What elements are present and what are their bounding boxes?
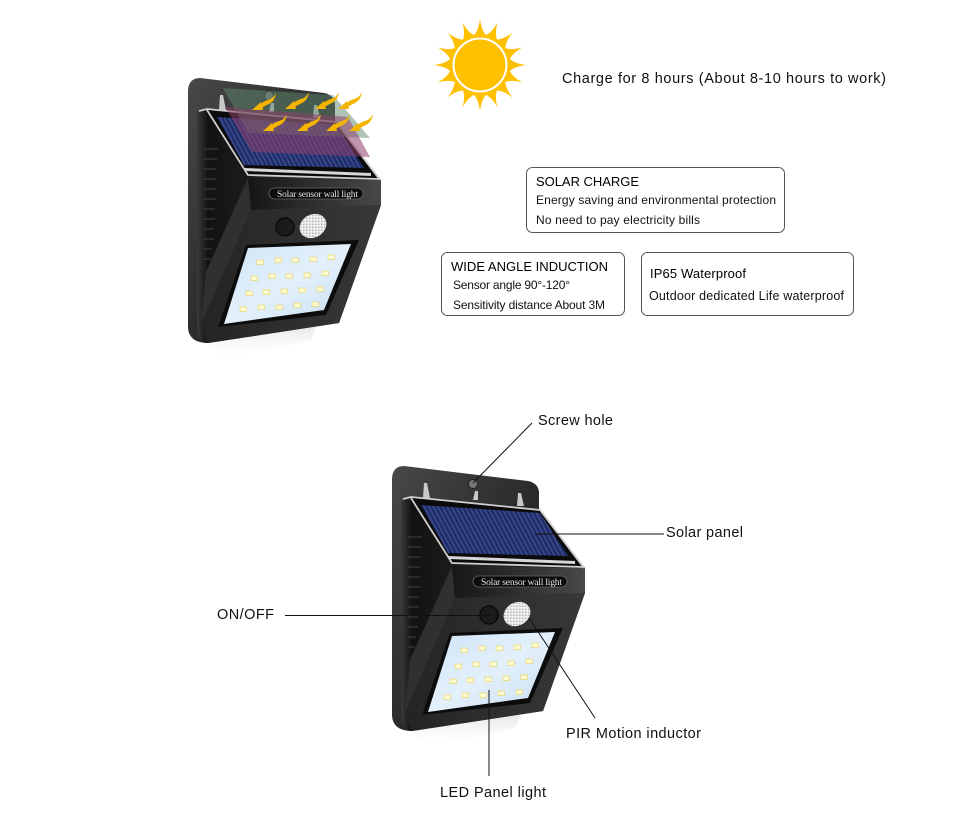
callout: PIR motion inductor xyxy=(529,618,701,742)
on/off button xyxy=(276,218,294,236)
left diagonal highlight xyxy=(201,178,251,325)
screw hole xyxy=(264,92,274,100)
side ribs xyxy=(204,149,218,259)
panel: wide angle induction: Sensitivity distance About 3M xyxy=(453,298,605,312)
charging arrows xyxy=(252,92,373,131)
panel: IP65 waterproof: IP65 Waterproof xyxy=(650,266,746,281)
floor reflection xyxy=(410,715,520,748)
screw hole xyxy=(468,480,478,488)
left diagonal highlight xyxy=(405,566,455,713)
backplate xyxy=(392,466,539,731)
LED frame xyxy=(218,240,359,327)
illustration: top solar wall light with charging overlay xyxy=(188,78,381,360)
LED panel xyxy=(224,244,351,324)
LED panel xyxy=(428,632,555,712)
backplate xyxy=(188,78,335,343)
front band xyxy=(248,178,381,210)
floor reflection xyxy=(206,327,316,360)
side ribs xyxy=(408,537,422,647)
name pill: Solar sensor wall light xyxy=(481,578,562,588)
LED chips xyxy=(444,643,538,700)
lower face xyxy=(405,593,585,731)
charging overlay: green and purple layers xyxy=(223,88,370,157)
panel: solar charge: SOLAR CHARGE xyxy=(536,174,639,189)
PIR sensor xyxy=(499,597,535,631)
panel: solar charge xyxy=(526,168,784,232)
name pill: Solar sensor wall light xyxy=(277,190,358,200)
callout: PIR motion inductor: PIR Motion inductor xyxy=(566,726,701,742)
housing xyxy=(401,497,585,731)
panel: IP65 waterproof: Outdoor dedicated Life waterproof xyxy=(649,289,845,303)
panel: solar charge: Energy saving and environmental protection xyxy=(536,193,776,207)
housing xyxy=(197,109,381,343)
front band xyxy=(452,566,585,598)
solar panel xyxy=(421,505,568,556)
panel: IP65 waterproof xyxy=(642,252,854,316)
callout: screw hole: Screw hole xyxy=(538,413,613,429)
callout: LED panel light xyxy=(440,690,546,801)
hood trim xyxy=(199,109,380,180)
lower face xyxy=(201,205,381,343)
callout: on/off: ON/OFF xyxy=(217,607,274,623)
panel: wide angle induction xyxy=(442,252,624,316)
arrow row two xyxy=(263,114,373,131)
on/off button xyxy=(480,606,498,624)
panel: wide angle induction: WIDE ANGLE INDUCTION xyxy=(451,259,608,274)
mounting hooks xyxy=(219,95,320,118)
mounting hooks xyxy=(423,483,524,506)
callout: screw hole xyxy=(473,413,613,483)
PIR sensor xyxy=(295,209,331,243)
callout: LED panel light: LED Panel light xyxy=(440,785,546,801)
silver bar xyxy=(244,168,371,176)
silver bar xyxy=(448,556,575,564)
arrow row one xyxy=(252,92,362,110)
panel: solar charge: No need to pay electricity bills xyxy=(536,213,700,227)
hood trim xyxy=(403,497,584,568)
charge time caption: Charge for 8 hours (About 8-10 hours to work) xyxy=(562,71,886,87)
illustration: bottom solar wall light xyxy=(392,466,585,748)
hood bezel xyxy=(411,498,584,567)
solar panel xyxy=(217,117,364,168)
LED frame xyxy=(422,628,563,715)
callout: solar panel: Solar panel xyxy=(666,525,743,541)
hood bezel xyxy=(207,110,380,179)
LED chips xyxy=(240,255,334,312)
panel: wide angle induction: Sensor angle 90°-120° xyxy=(453,278,570,292)
icon: sun xyxy=(434,19,526,111)
